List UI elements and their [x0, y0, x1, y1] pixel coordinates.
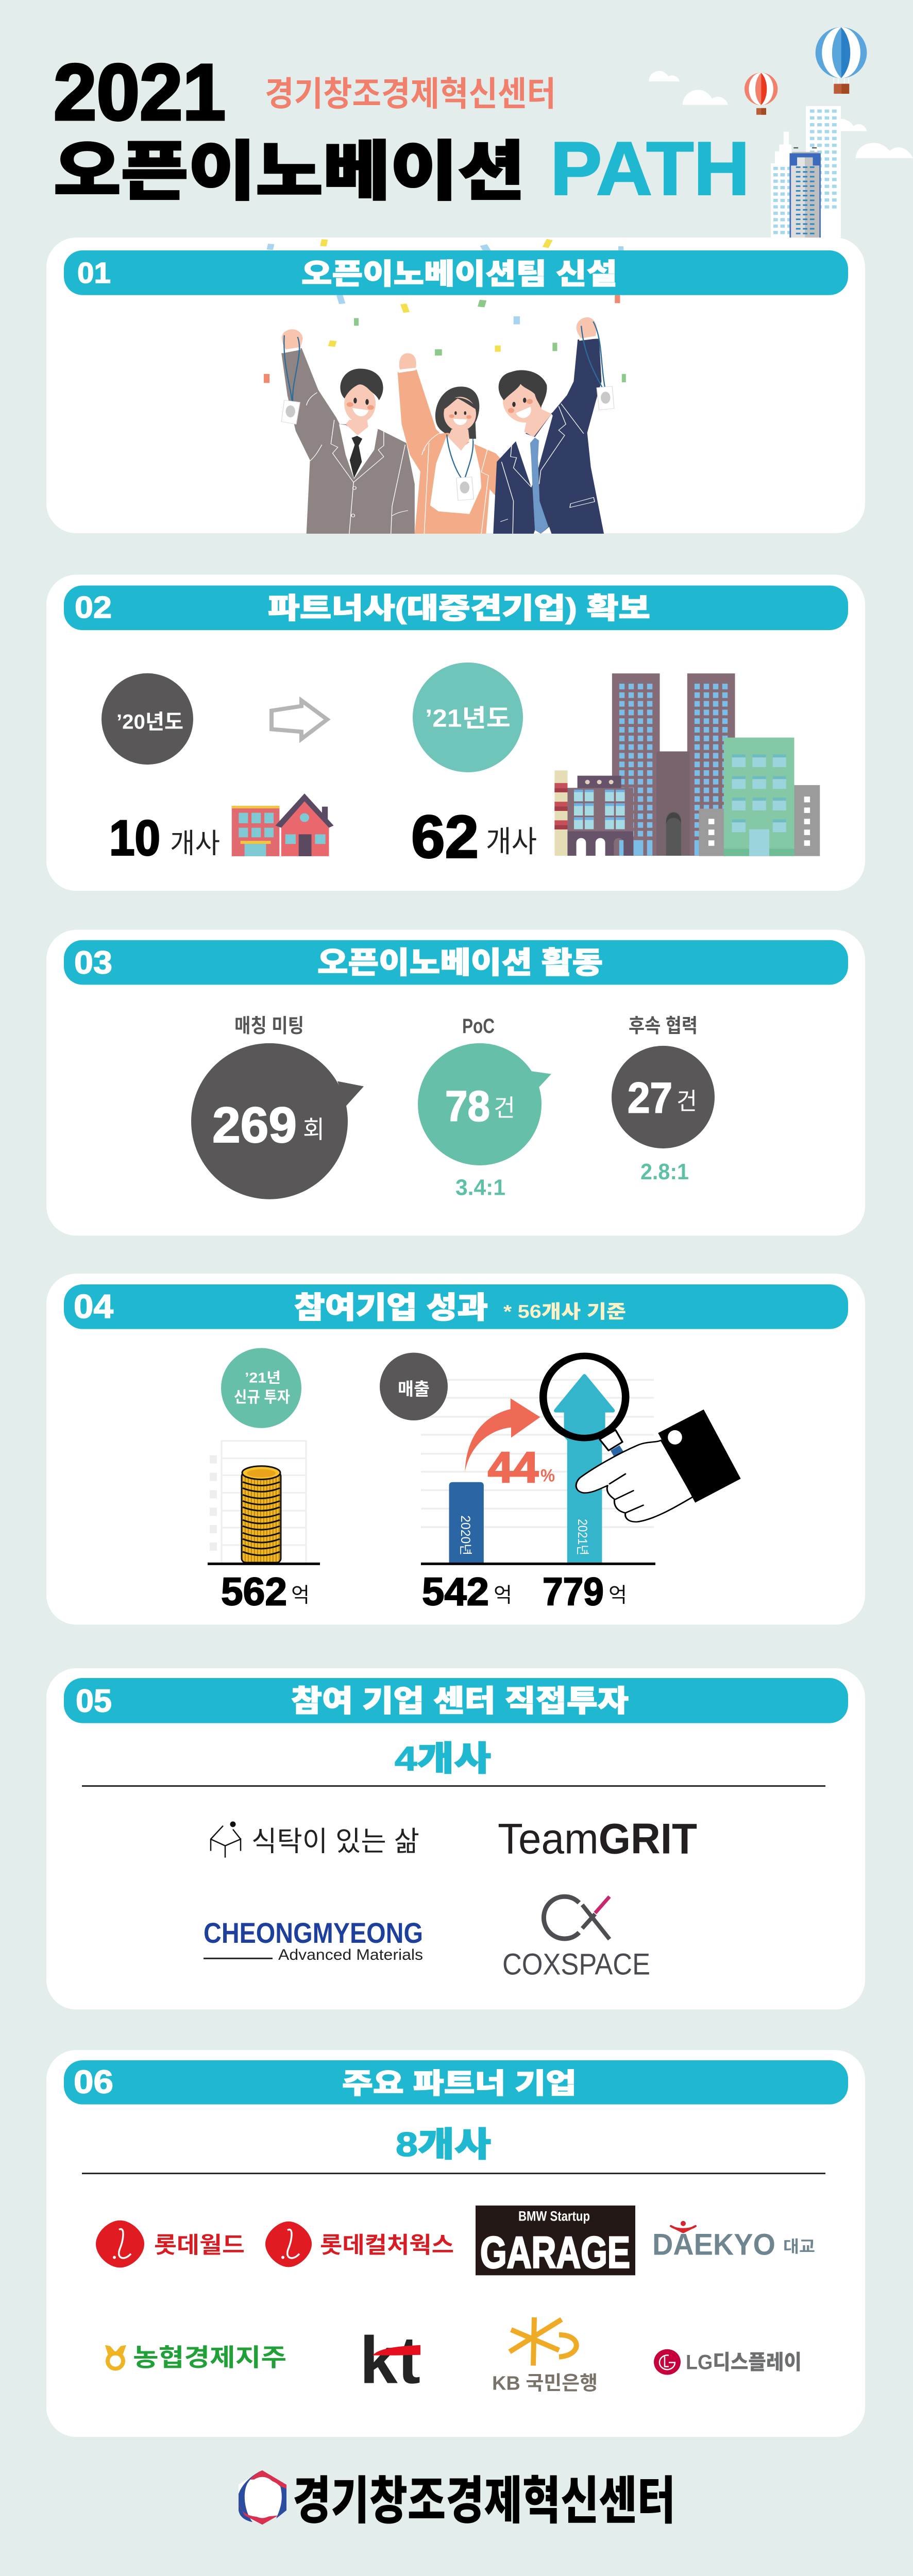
logo: KB Kookmin Bank: KB 국민은행: [492, 2373, 598, 2394]
bar: 2020: [449, 1482, 484, 1563]
icon: small buildings and house: [232, 793, 333, 856]
stat: matching meetings: [191, 1015, 364, 1199]
2021 badge: ’21년도: [425, 705, 511, 732]
section number: 02: [75, 590, 112, 624]
section number: 03: [74, 945, 112, 980]
card: [46, 575, 865, 891]
big blue balloon: [816, 27, 867, 94]
woman: [398, 353, 500, 534]
panel 05: center direct investment: [46, 1668, 865, 2009]
stat: PoC: 3.4:1: [455, 1175, 505, 1200]
left white building: [771, 132, 791, 238]
panel 04: participating company results: [46, 1274, 865, 1624]
chart: revenue growth: 억: [608, 1584, 627, 1607]
panel 01: team launch: [46, 238, 865, 534]
badge: new investment: ’21년: [245, 1369, 281, 1385]
stat: 62 companies: 개사: [486, 825, 537, 858]
stat: matching meetings: 회: [303, 1116, 325, 1144]
chart: new investment coin stack: [208, 1440, 320, 1614]
pointing hand: [576, 1410, 741, 1522]
logo: life with a table: 식탁이 있는 삶: [251, 1826, 419, 1857]
card: [46, 1274, 865, 1624]
heading bar: [64, 940, 848, 985]
chart: revenue growth: [380, 1352, 741, 1614]
logo: LG Display: LG디스플레이: [686, 2351, 802, 2374]
man in navy suit: [493, 317, 614, 534]
stat: matching meetings: 269: [212, 1096, 297, 1153]
badge: revenue: [380, 1352, 448, 1420]
chart: new investment coin stack: 억: [291, 1584, 310, 1607]
arrow: 2020 to 2021: [272, 701, 327, 739]
logo: COXSPACE: COXSPACE: [502, 1948, 650, 1981]
section number: 05: [76, 1684, 112, 1719]
stat: follow-up cooperation: 건: [677, 1088, 697, 1114]
logo: COXSPACE: [502, 1896, 650, 1981]
logo: Lotte World: 롯데월드: [154, 2233, 245, 2258]
coin stack: [242, 1466, 281, 1563]
bar: 2021 arrow: [554, 1374, 615, 1563]
logo: Cheongmyeong Advanced Materials: CHEONGMYEONG: [204, 1917, 423, 1949]
panel 03: open innovation activities: [46, 930, 865, 1235]
title: PATH: PATH: [550, 127, 750, 211]
stat: PoC: [418, 1015, 551, 1200]
card: [46, 2050, 865, 2437]
stat: follow-up cooperation: 후속 협력: [629, 1015, 698, 1037]
logo: Daekyo: [652, 2221, 815, 2261]
panel 06: main partner companies: [46, 2050, 865, 2437]
stat: PoC: PoC: [462, 1015, 495, 1038]
stat: 10 companies: 개사: [170, 828, 220, 859]
stat: matching meetings: 매칭 미팅: [234, 1015, 304, 1037]
logo: TeamGRIT: TeamGRIT: [498, 1815, 697, 1863]
heading bar: [64, 2060, 848, 2105]
title: 2021: 2021: [54, 47, 226, 137]
logo: KB Kookmin Bank: [492, 2317, 598, 2394]
stat: 10 companies: [109, 810, 220, 866]
logo: BMW Startup Garage: BMW Startup: [518, 2209, 590, 2224]
magnifier: [543, 1356, 625, 1456]
stat: 62 companies: [411, 803, 537, 870]
section number: 01: [77, 257, 111, 290]
logo: Daekyo: 대교: [783, 2238, 815, 2256]
heading bar: [64, 250, 848, 295]
stat: PoC: 건: [494, 1094, 515, 1121]
blue tower: [789, 147, 821, 238]
footnote: based on 56 companies: * 56개사 기준: [503, 1301, 626, 1322]
count: 8 companies: 8개사: [396, 2125, 491, 2163]
badge: revenue: 매출: [398, 1380, 430, 1399]
count: 4 companies: 4개사: [395, 1739, 491, 1777]
card: [46, 930, 865, 1235]
logo: BMW Startup Garage: [476, 2206, 635, 2277]
logo: LG Display: [654, 2349, 802, 2375]
badge: new investment: [221, 1348, 301, 1428]
icon: large city buildings: [554, 673, 820, 856]
bar label: 2020: 2020년: [458, 1515, 472, 1555]
section heading: 참여기업 성과: [294, 1292, 488, 1325]
logo: Cheongmyeong Advanced Materials: Advanced Materials: [278, 1946, 423, 1963]
title block: [54, 47, 750, 211]
tall white building: [806, 106, 841, 238]
heading bar: [64, 1678, 848, 1723]
confetti: [264, 239, 626, 383]
stat: 10 companies: 10: [109, 810, 160, 866]
title: open innovation: 오픈이노베이션: [54, 135, 525, 208]
logo: Cheongmyeong Advanced Materials: [204, 1917, 423, 1963]
section heading: 참여 기업 센터 직접투자: [291, 1685, 629, 1718]
subtitle: organisation: 경기창조경제혁신센터: [265, 75, 556, 113]
illustration: three cheering employees: [281, 317, 614, 534]
logo: Lotte World: [96, 2221, 245, 2267]
stat: PoC: 78: [445, 1081, 490, 1130]
logo: BMW Startup Garage: GARAGE: [480, 2228, 630, 2277]
bar label: 2021: 2021년: [575, 1519, 589, 1555]
center name: 경기창조경제혁신센터: [293, 2473, 675, 2530]
stat: 62 companies: 62: [411, 803, 479, 870]
2021 badge: [413, 663, 523, 772]
section heading: 주요 파트너 기업: [342, 2069, 577, 2099]
label: 44 percent: 44: [488, 1443, 538, 1491]
badge: new investment: 신규 투자: [234, 1389, 290, 1406]
2020 badge: [102, 673, 193, 765]
value: 562: 562: [221, 1570, 287, 1614]
card: [46, 238, 865, 533]
heading bar: [64, 1284, 848, 1329]
emblem: [239, 2470, 286, 2524]
stat: follow-up cooperation: 2.8:1: [640, 1159, 689, 1184]
clouds: [649, 71, 913, 158]
logo: Lotte Cultureworks: [265, 2222, 454, 2267]
logo: Daekyo: DAEKYO: [652, 2228, 775, 2261]
value: 542: 542: [422, 1570, 489, 1614]
heading bar: [64, 585, 848, 630]
chart: revenue growth: 억: [494, 1584, 512, 1607]
section number: 04: [74, 1287, 113, 1325]
value: 779: 779: [543, 1570, 604, 1614]
stat: follow-up cooperation: 27: [628, 1074, 672, 1122]
man in grey suit: [281, 329, 415, 534]
logo: kt: kt: [360, 2324, 420, 2397]
arrow: growth: [465, 1398, 540, 1472]
2020 badge: ’20년도: [116, 710, 183, 733]
logo: Lotte Cultureworks: 롯데컬처웍스: [320, 2233, 454, 2258]
panel 02: partner companies: [46, 575, 865, 891]
small red balloon: [745, 73, 777, 115]
card: [46, 1668, 865, 2009]
footer logo: Gyeonggi center: [239, 2470, 675, 2530]
section number: 06: [74, 2064, 113, 2100]
stat: follow-up cooperation: [612, 1015, 715, 1184]
label: 44 percent: %: [540, 1466, 555, 1485]
section heading: 오픈이노베이션팀 신설: [301, 258, 617, 290]
section heading: 파트너사(대중견기업) 확보: [268, 592, 650, 624]
section heading: 오픈이노베이션 활동: [317, 947, 603, 979]
logo: NH agribusiness holdings: 농협경제지주: [133, 2345, 286, 2372]
logo: life with a table: [211, 1821, 419, 1858]
header illustration: skyline, balloons and clouds: [649, 27, 913, 238]
